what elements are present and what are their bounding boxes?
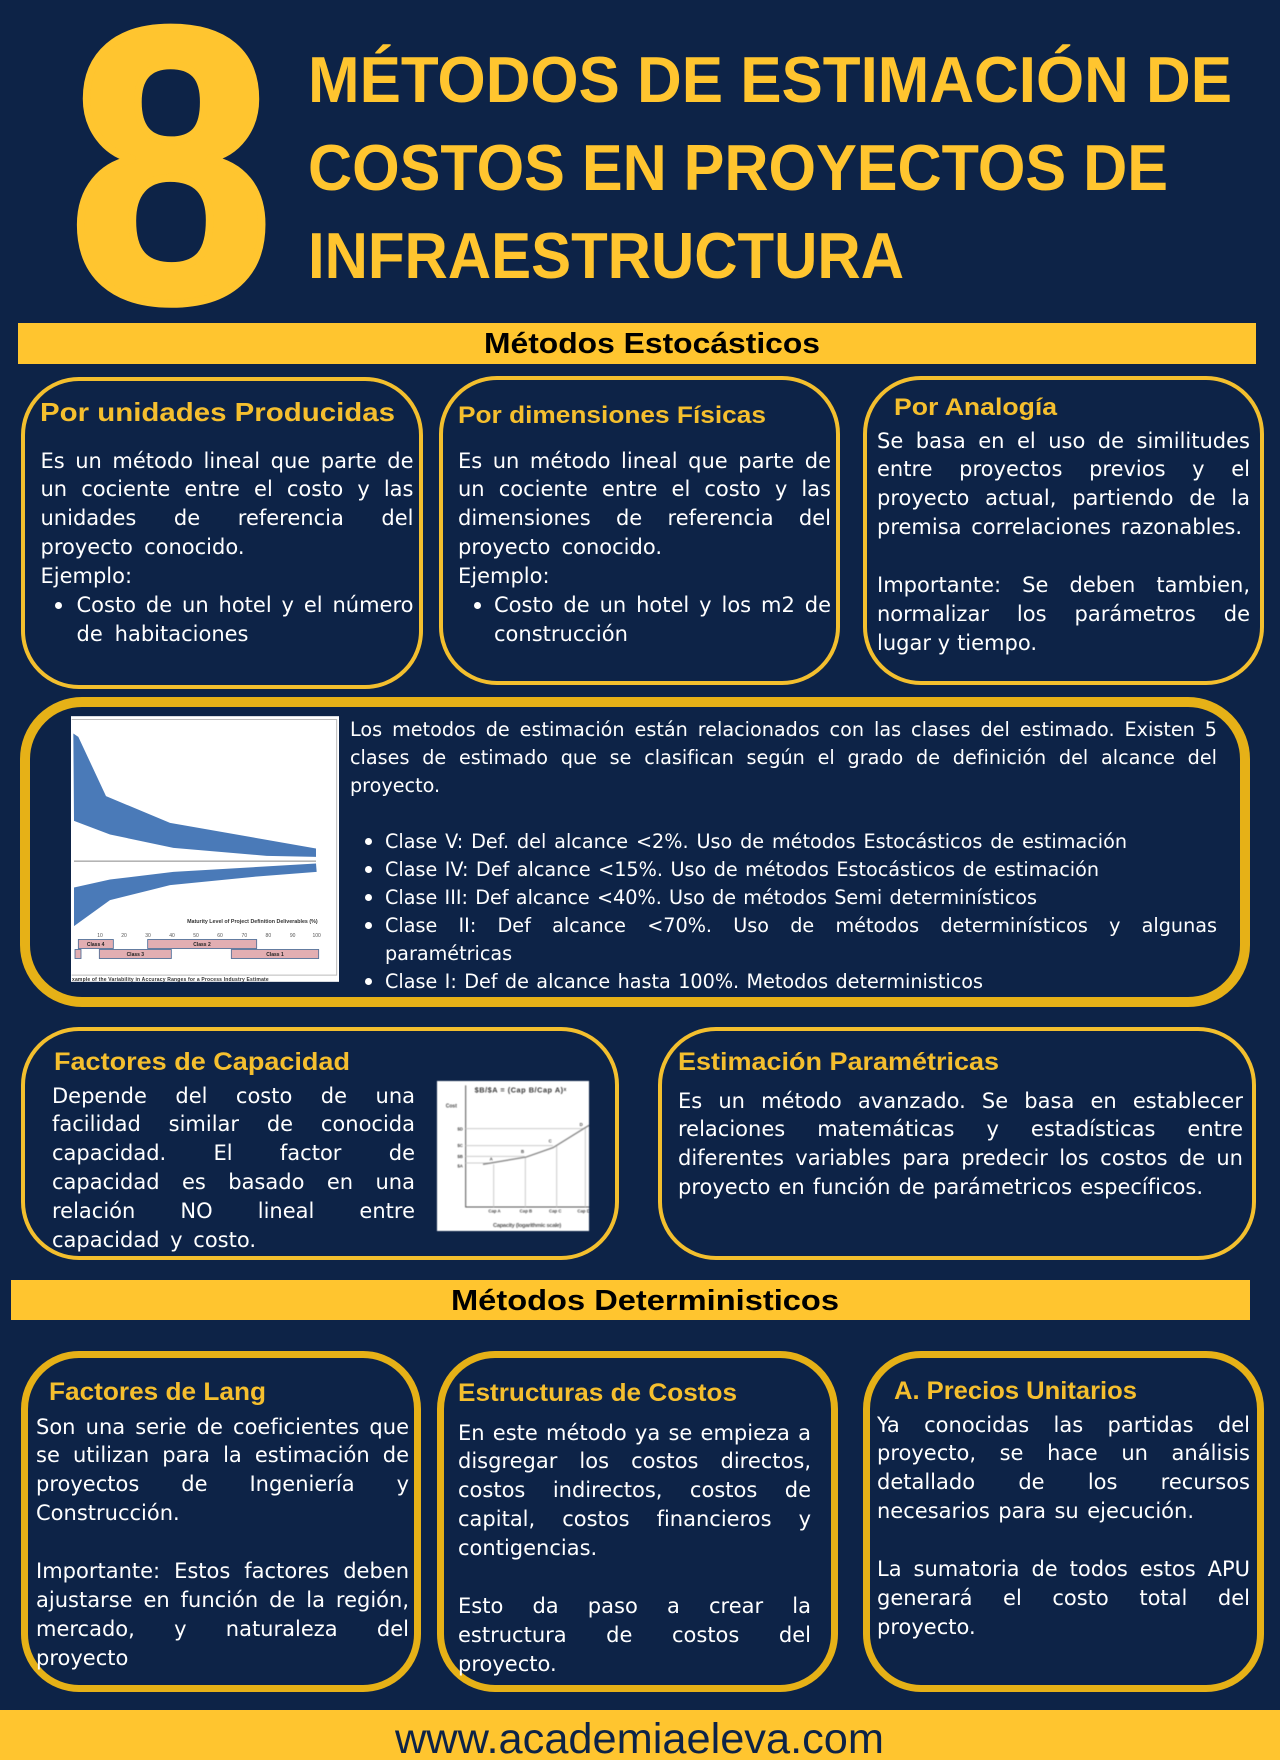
chart: variability in accuracy ranges: Class 1 bbox=[266, 952, 284, 958]
bullet bbox=[474, 602, 481, 609]
body text: Se basa en el uso de similitudes bbox=[877, 428, 1250, 452]
body text: En este método ya se empieza a bbox=[458, 1420, 811, 1444]
panel: estimación paramétricas bbox=[658, 1027, 1256, 1260]
body text: proyecto actual, partiendo de la bbox=[877, 486, 1250, 510]
body text: Importante: Estos factores deben bbox=[36, 1559, 409, 1583]
panel: por unidades producidas bbox=[21, 377, 423, 689]
body text: Ya conocidas las partidas del bbox=[877, 1412, 1250, 1436]
body text: proyecto bbox=[36, 1646, 128, 1670]
body text: proyecto conocido. bbox=[458, 535, 662, 559]
class list: Clase I: Def de alcance hasta 100%. Metodos deterministicos bbox=[385, 970, 983, 993]
chart: variability in accuracy ranges: Class 3 bbox=[127, 952, 144, 958]
title: MÉTODOS DE ESTIMACIÓN DE bbox=[308, 43, 1232, 116]
body text: entre proyectos previos y el bbox=[877, 457, 1250, 481]
chart: variability in accuracy ranges: Class 4 bbox=[87, 942, 105, 948]
chart: capacity cost curve: C bbox=[549, 1139, 552, 1144]
body text: Costo de un hotel y los m2 de bbox=[494, 593, 831, 617]
chart: capacity cost curve: Cap C bbox=[549, 1209, 562, 1214]
heading: Factores de Lang bbox=[49, 1378, 266, 1406]
panel: clases del estimado bbox=[20, 697, 1250, 1007]
body text: capacidad y costo. bbox=[52, 1228, 256, 1252]
body text: Son una serie de coeficientes que bbox=[36, 1414, 409, 1438]
body text: normalizar los parámetros de bbox=[877, 602, 1250, 626]
body text: facilidad similar de conocida bbox=[52, 1112, 415, 1136]
class list: Clase IV: Def alcance <15%. Uso de métodos Estocásticos de estimación bbox=[385, 858, 1099, 881]
chart: variability in accuracy ranges: 70 bbox=[242, 933, 247, 939]
body text: contigencias. bbox=[458, 1536, 597, 1560]
panel: factores de capacidad bbox=[21, 1027, 619, 1260]
title: INFRAESTRUCTURA bbox=[308, 219, 904, 290]
chart: capacity cost curve: B bbox=[521, 1149, 524, 1154]
body text bbox=[40, 448, 414, 646]
title bbox=[308, 43, 1232, 290]
body text: proyecto conocido. bbox=[40, 535, 244, 559]
chart: variability in accuracy ranges: Maturity Level of Project Definition Deliverables (%) bbox=[187, 919, 318, 925]
chart: variability in accuracy ranges: 30 bbox=[145, 933, 151, 939]
body text: capital, costos financieros y bbox=[458, 1507, 811, 1531]
panel: precios unitarios bbox=[863, 1351, 1264, 1692]
body text: lugar y tiempo. bbox=[877, 631, 1037, 655]
intro text: Los metodos de estimación están relacionados con las clases del estimado. Existen 5 bbox=[350, 718, 1217, 741]
body text: Ejemplo: bbox=[40, 564, 132, 588]
panel: por dimensiones físicas bbox=[439, 376, 840, 685]
body text: diferentes variables para predecir los costos de un bbox=[678, 1146, 1243, 1170]
body text: se utilizan para la estimación de bbox=[36, 1443, 409, 1467]
chart: capacity cost curve: $C bbox=[457, 1143, 463, 1148]
chart: capacity cost curve bbox=[436, 1080, 590, 1232]
body text: construcción bbox=[494, 622, 628, 646]
chart: capacity cost curve: $B bbox=[457, 1154, 463, 1159]
body text: mercado, y naturaleza del bbox=[36, 1617, 409, 1641]
chart: capacity cost curve: $A bbox=[457, 1163, 464, 1168]
body text: relaciones matemáticas y estadísticas entre bbox=[678, 1117, 1243, 1141]
chart: variability in accuracy ranges: 60 bbox=[217, 933, 223, 939]
body text: relación NO lineal entre bbox=[52, 1199, 415, 1223]
class list: Clase III: Def alcance <40%. Uso de métodos Semi determinísticos bbox=[385, 886, 1037, 909]
chart: capacity cost curve: Cost bbox=[446, 1104, 457, 1110]
intro text: clases de estimado que se clasifican según el grado de definición del alcance del bbox=[350, 746, 1217, 769]
body text: Depende del costo de una bbox=[52, 1084, 415, 1108]
body text: necesarios para su ejecución. bbox=[877, 1499, 1194, 1523]
chart: capacity cost curve: Cap A bbox=[488, 1209, 502, 1214]
body text bbox=[678, 1088, 1243, 1199]
chart: variability in accuracy ranges: 50 bbox=[193, 933, 199, 939]
heading: Por unidades Producidas bbox=[40, 397, 395, 427]
body text: proyecto. bbox=[458, 1652, 557, 1676]
intro text: proyecto. bbox=[350, 774, 440, 797]
body text: unidades de referencia del bbox=[40, 506, 414, 530]
body text: Esto da paso a crear la bbox=[458, 1594, 811, 1618]
section banner: Métodos Estocásticos bbox=[18, 323, 1256, 364]
heading: Factores de Capacidad bbox=[54, 1048, 350, 1076]
body text: Construcción. bbox=[36, 1501, 180, 1525]
footer: website bbox=[0, 1710, 1280, 1760]
bullets bbox=[365, 838, 372, 985]
body text: Es un método avanzado. Se basa en establecer bbox=[678, 1088, 1243, 1112]
body text: un cociente entre el costo y las bbox=[458, 477, 831, 501]
panel: estructuras de costos bbox=[437, 1351, 838, 1692]
body text: Importante: Se deben tambien, bbox=[877, 573, 1250, 597]
class list: paramétricas bbox=[385, 942, 512, 965]
body text: un cociente entre el costo y las bbox=[40, 477, 414, 501]
body text: La sumatoria de todos estos APU bbox=[877, 1557, 1250, 1581]
heading: Por dimensiones Físicas bbox=[458, 402, 766, 429]
body text: estructura de costos del bbox=[458, 1623, 811, 1647]
body text: premisa correlaciones razonables. bbox=[877, 515, 1242, 539]
body text: disgregar los costos directos, bbox=[458, 1449, 811, 1473]
body text: capacidad es basado en una bbox=[52, 1170, 415, 1194]
heading: Estructuras de Costos bbox=[458, 1379, 737, 1407]
chart: variability in accuracy ranges: 10 bbox=[97, 933, 103, 939]
body text: Es un método lineal que parte de bbox=[458, 448, 831, 472]
chart: capacity cost curve: A bbox=[490, 1156, 494, 1161]
section banner: Métodos Deterministicos: Métodos Deterministicos bbox=[451, 1285, 839, 1317]
heading: Estimación Paramétricas bbox=[678, 1048, 999, 1076]
body text: costos indirectos, costos de bbox=[458, 1478, 811, 1502]
heading: Por Analogía bbox=[894, 394, 1058, 421]
chart: capacity cost curve: Cap B bbox=[520, 1209, 532, 1214]
chart: variability in accuracy ranges: 40 bbox=[169, 933, 175, 939]
intro text bbox=[350, 718, 1217, 797]
body text: generará el costo total del bbox=[877, 1586, 1250, 1610]
body text: proyecto. bbox=[877, 1615, 976, 1639]
body text: Costo de un hotel y el número bbox=[76, 593, 414, 617]
heading: A. Precios Unitarios bbox=[894, 1377, 1137, 1405]
chart: capacity cost curve: $B/$A = (Cap B/Cap A)ˣ bbox=[475, 1086, 567, 1095]
body text bbox=[458, 448, 831, 646]
class list: Clase II: Def alcance <70%. Uso de métodos determinísticos y algunas bbox=[385, 914, 1217, 937]
body text: proyecto en función de parámetricos específicos. bbox=[678, 1175, 1203, 1199]
chart: capacity cost curve: Capacity (logarithmic scale) bbox=[493, 1223, 561, 1229]
chart: variability in accuracy ranges bbox=[71, 716, 339, 982]
chart: variability in accuracy ranges: 20 bbox=[121, 933, 127, 939]
chart: capacity cost curve: $D bbox=[457, 1126, 463, 1131]
section banner: Métodos Estocásticos: Métodos Estocásticos bbox=[484, 328, 820, 360]
body text bbox=[458, 1420, 811, 1676]
panel: factores de lang bbox=[21, 1351, 421, 1692]
body text: ajustarse en función de la región, bbox=[36, 1588, 409, 1612]
body text: de habitaciones bbox=[76, 622, 248, 646]
body text bbox=[52, 1084, 415, 1252]
panel: por analogía bbox=[863, 376, 1264, 685]
body text: detallado de los recursos bbox=[877, 1470, 1250, 1494]
body text: capacidad. El factor de bbox=[52, 1141, 415, 1165]
bullet bbox=[55, 602, 62, 609]
chart: capacity cost curve: D bbox=[580, 1122, 583, 1127]
chart: variability in accuracy ranges: 80 bbox=[266, 933, 271, 939]
body text bbox=[877, 428, 1250, 655]
body text: proyectos de Ingeniería y bbox=[36, 1472, 409, 1496]
chart: variability in accuracy ranges: Class 2 bbox=[193, 942, 211, 948]
body text bbox=[36, 1414, 409, 1670]
body text: Ejemplo: bbox=[458, 564, 550, 588]
body text bbox=[877, 1412, 1250, 1639]
class list: Clase V: Def. del alcance <2%. Uso de métodos Estocásticos de estimación bbox=[385, 830, 1127, 853]
class list bbox=[385, 830, 1217, 993]
body text: dimensiones de referencia del bbox=[458, 506, 831, 530]
body text: proyecto, se hace un análisis bbox=[877, 1441, 1250, 1465]
section banner: Métodos Deterministicos bbox=[11, 1280, 1250, 1320]
chart: variability in accuracy ranges: 90 bbox=[290, 933, 296, 939]
title: COSTOS EN PROYECTOS DE bbox=[308, 131, 1168, 204]
chart: variability in accuracy ranges: 100 bbox=[312, 933, 321, 939]
body text: Es un método lineal que parte de bbox=[40, 448, 414, 472]
